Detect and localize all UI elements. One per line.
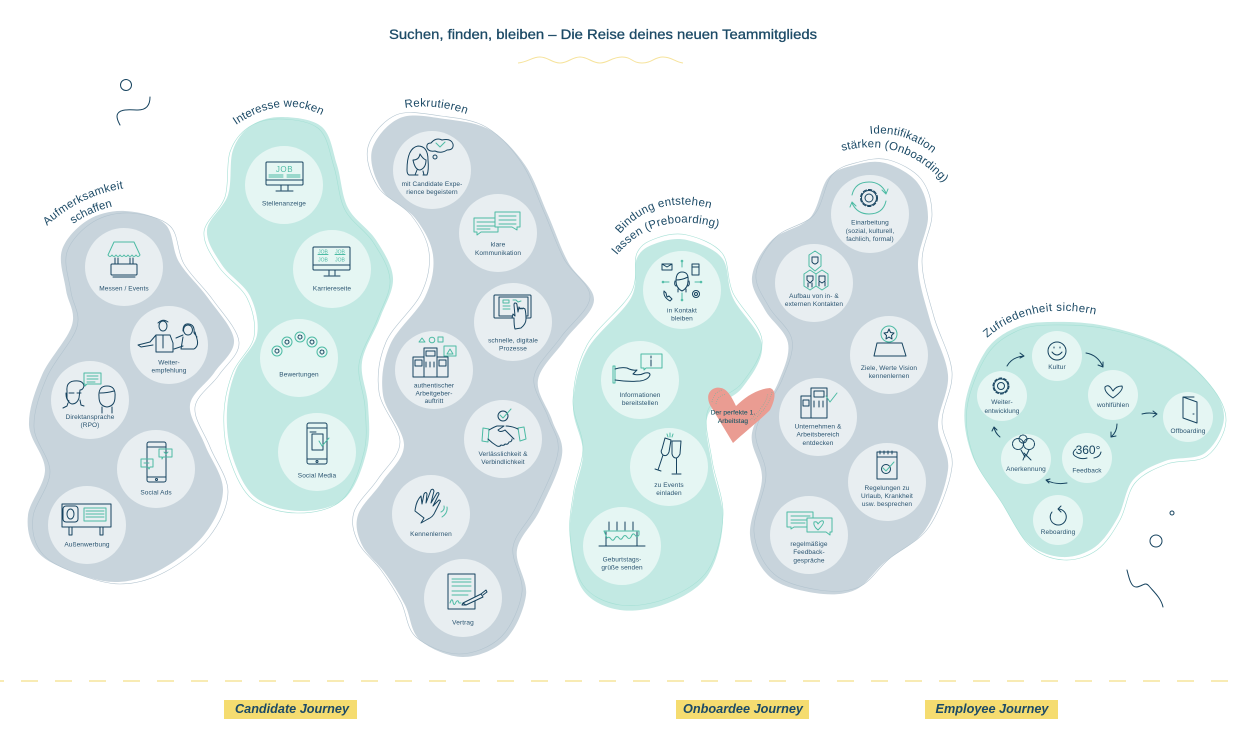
card: Anerkennung: [1001, 434, 1051, 484]
card: Verlässlichkeit & Verbindlichkeit: [464, 400, 542, 478]
card: Offboarding: [1163, 392, 1213, 442]
blob background: [357, 115, 594, 657]
label line 3: usw. besprechen: [862, 501, 912, 508]
card: Bewertungen: [260, 319, 338, 397]
icon: two heads with speech bubble: [63, 373, 115, 413]
icon: three hexagon portraits: [804, 251, 828, 290]
label: Vertrag: [452, 620, 474, 626]
label: Direktansprache: [66, 414, 115, 421]
label: Informationen: [619, 392, 661, 399]
icon: waving hand: [415, 489, 447, 523]
icon: gear: [993, 378, 1009, 394]
label: Regelungen zu: [864, 485, 910, 492]
icon: heart: [1105, 386, 1122, 398]
label line 3: entdecken: [803, 440, 834, 447]
icon: 360 degrees: 360°: [1076, 443, 1101, 457]
panel heading line 1: Bindung entstehen: [614, 196, 711, 234]
label: mit Candidate Expe-: [402, 181, 462, 188]
panel: Rekrutieren: [352, 98, 594, 657]
card: Feedback: [1062, 433, 1112, 483]
icon: billboard: [62, 504, 111, 535]
tag: Employee Journey: [925, 700, 1058, 719]
card: Kennenlernen: [392, 475, 470, 553]
icon: feedback bubbles: [787, 512, 832, 535]
panel heading line 2: schaffen: [70, 201, 112, 224]
card: Direktansprache: [51, 361, 129, 439]
icon: buildings with shapes: [413, 337, 456, 377]
label: Aufbau von in- &: [789, 293, 839, 300]
label: Stellenanzeige: [262, 200, 306, 208]
label line 3: fachlich, formal): [846, 236, 894, 243]
icon: monitor with four JOB ads: JOB: [318, 258, 329, 264]
icon: phone with check: [307, 423, 329, 464]
heart: Der perfekte 1. Arbeitstag: Der perfekte 1.: [711, 410, 755, 416]
title: Suchen, finden, bleiben – Die Reise deines neuen Teammitglieds: [389, 26, 817, 42]
label line 2: kennenlernen: [869, 373, 910, 380]
icon: door: [1183, 397, 1197, 423]
tag: Onboardee Journey: [676, 700, 809, 719]
card: Kultur: [1032, 331, 1082, 381]
card: Weiterentwicklung: [977, 371, 1027, 421]
decoration: top left circle and squiggle: [117, 80, 150, 125]
card: Aufbau von in- & externen Kontakten: [775, 244, 853, 322]
label: Außenwerbung: [64, 542, 110, 548]
label: Kennenlernen: [410, 531, 452, 538]
icon: person with contact channels: [662, 260, 702, 301]
icon: market stall: [108, 242, 140, 277]
blob background: [964, 322, 1224, 557]
tag: Candidate Journey: Candidate Journey: [235, 702, 350, 716]
label: Weiter-: [158, 360, 180, 366]
card: Stellenanzeige: [245, 146, 323, 224]
label: Social Media: [298, 472, 336, 480]
blob background: [750, 162, 948, 594]
icon: tablet and hand: [494, 295, 531, 329]
card: Social Media: [278, 413, 356, 491]
panel heading line 2: lassen (Preboarding): [611, 215, 718, 254]
blob outline: [966, 325, 1226, 560]
panel heading: Interesse wecken: [232, 100, 324, 124]
icon: notepad with check: [877, 451, 897, 479]
label line 2: Arbeitgeber-: [416, 390, 452, 398]
label: Social Ads: [140, 490, 172, 496]
label: in Kontakt: [667, 308, 697, 314]
panel heading line 2: stärken (Onboarding): [842, 139, 948, 182]
card: Ziele, Werte, Vision: [850, 316, 928, 394]
label line 2: externen Kontakten: [785, 301, 843, 308]
panel heading line 1: Identifikation: [870, 125, 936, 153]
blob outline: [204, 119, 390, 513]
label line 2: Urlaub, Krankheit: [861, 493, 913, 500]
icon: monitor with four JOB ads: JOB: [318, 250, 329, 256]
label: Geburtstags-: [603, 556, 641, 564]
icon: monitor with four JOB ads: [313, 247, 350, 276]
panel: Zufriedenheit sichern: [964, 302, 1226, 560]
label line 2: Arbeitsbereich: [797, 432, 840, 438]
icon: woman with thought cloud: [407, 139, 453, 175]
icon: contract and pen: [448, 574, 487, 609]
card: Außenwerbung: [48, 486, 126, 564]
card: klare Kommunikation: [459, 194, 537, 272]
icon: gear with cycle arrows: [850, 182, 888, 214]
heart: Der perfekte 1. Arbeitstag: [708, 388, 774, 443]
label line 2: entwicklung: [984, 408, 1020, 415]
card: wohlfühlen: [1088, 370, 1138, 420]
icon: champagne glasses: [655, 433, 681, 474]
icon: smiley: [1048, 342, 1066, 360]
label line 2: Feedback-: [793, 549, 825, 556]
label: Feedback: [1072, 468, 1102, 474]
label: zu Events: [654, 482, 684, 489]
label: regelmäßige: [790, 541, 828, 548]
cycle arrows: [992, 353, 1157, 484]
blob outline: [570, 234, 762, 606]
icon: flower bouquet: [1012, 435, 1034, 460]
label line 2: Prozesse: [499, 346, 527, 352]
icon: crystal ball with star: [874, 326, 906, 356]
dashed divider: [0, 680, 1228, 682]
panel heading: Rekrutieren: [405, 98, 468, 114]
label: Weiter-: [991, 399, 1013, 406]
tag: Employee Journey: Employee Journey: [936, 702, 1050, 716]
icon: five rating stars: [272, 332, 327, 357]
icon: speech bubbles: [474, 212, 520, 235]
label: wohlfühlen: [1096, 402, 1129, 409]
blob background: [207, 117, 393, 511]
card: in Kontakt bleiben: [643, 251, 721, 329]
label: Ziele, Werte Vision: [861, 365, 917, 372]
heart: Der perfekte 1. Arbeitstag: Arbeitstag: [718, 418, 748, 425]
panel: Bindung entstehen lassen (Preboarding): [569, 196, 762, 611]
panel: Identifikation stärken (Onboarding): [750, 125, 952, 594]
icon: phone with bubbles: [141, 442, 172, 482]
panel: Aufmerksamkeit schaffen: [28, 181, 240, 584]
card: schnelle, digitale Prozesse: [474, 283, 552, 361]
label line 2: (RPO): [81, 422, 99, 429]
label: klare: [491, 242, 506, 248]
icon: birthday cake: [599, 522, 645, 546]
decoration: bottom right circles and squiggle: [1127, 511, 1174, 607]
label line 2: bereitstellen: [622, 400, 658, 407]
card: Messen / Events: [85, 228, 163, 306]
panel: Interesse wecken: [204, 100, 393, 514]
card: Reboarding: [1033, 495, 1083, 545]
label line 2: grüße senden: [601, 564, 643, 572]
card: Regelungen: [848, 443, 926, 521]
label line 2: (sozial, kulturell,: [846, 228, 894, 235]
panel heading line 1: Aufmerksamkeit: [44, 181, 124, 226]
card: Weiterempfehlung: [130, 306, 208, 384]
icon: monitor with four JOB ads: JOB: [335, 258, 346, 264]
card: Karriereseite: [293, 230, 371, 308]
label line 3: gespräche: [793, 558, 825, 564]
blob background: [570, 239, 762, 611]
blob outline: [353, 112, 590, 654]
label line 2: empfehlung: [152, 368, 187, 374]
label: Messen / Events: [99, 286, 149, 292]
label: Offboarding: [1171, 428, 1206, 435]
label: Anerkennung: [1006, 466, 1046, 473]
card: authentischer Arbeitgeberauftritt: [395, 331, 473, 409]
icon: hand holding info bubble: [613, 354, 662, 383]
icon: handshake with check: [482, 409, 526, 446]
icon: building with check: [801, 388, 837, 418]
card: zu Events einladen: [630, 428, 708, 506]
label: Karriereseite: [313, 286, 351, 292]
label line 2: Verbindlichkeit: [481, 459, 525, 466]
icon: circular arrow: [1050, 506, 1066, 525]
icon: monitor with JOB: JOB: [276, 165, 293, 174]
blob outline: [33, 213, 239, 584]
label line 2: rience begeistern: [406, 189, 458, 196]
blob background: [28, 211, 234, 582]
card: Geburtstagsgrüße senden: [583, 507, 661, 585]
card: Unternehmen & Arbeitsbereich: [779, 378, 857, 456]
label line 2: bleiben: [671, 316, 693, 322]
card: Social Ads: [117, 430, 195, 508]
blob outline: [754, 159, 952, 591]
label: Unternehmen &: [795, 424, 842, 430]
card: Candidate Experience: [393, 131, 471, 209]
panel heading: Zufriedenheit sichern: [982, 302, 1096, 338]
label: Reboarding: [1041, 529, 1076, 536]
tag: Candidate Journey: [224, 700, 357, 719]
icon: two people: [138, 320, 198, 352]
card: Vertrag: [424, 559, 502, 637]
card: Informationen bereitstellen: [601, 341, 679, 419]
label: schnelle, digitale: [488, 338, 538, 344]
card: Einarbeitung: [831, 175, 909, 253]
title wave underline: [518, 57, 683, 63]
label line 2: einladen: [656, 490, 682, 497]
card: Feedbackgespräche: [770, 496, 848, 574]
label: Verlässlichkeit &: [478, 451, 528, 458]
tag: Onboardee Journey: Onboardee Journey: [683, 702, 804, 716]
icon: monitor with four JOB ads: JOB: [335, 250, 346, 256]
label: Kultur: [1048, 364, 1067, 371]
label: Bewertungen: [279, 372, 319, 378]
label line 2: Kommunikation: [475, 250, 521, 257]
label: authentischer: [414, 382, 455, 390]
label: Einarbeitung: [851, 220, 889, 226]
label line 3: auftritt: [425, 398, 444, 405]
